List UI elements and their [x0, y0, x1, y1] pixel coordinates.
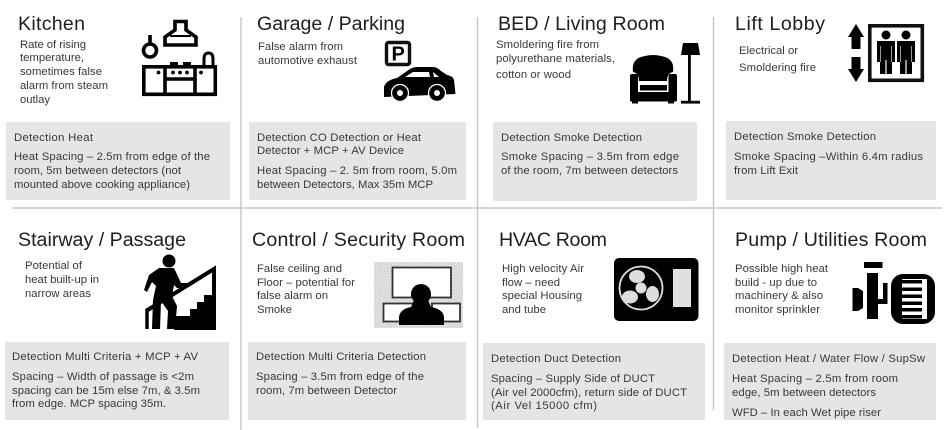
text: garage risk: automotive exhaust [258, 55, 358, 67]
text: lift detection: Detection Smoke Detection [734, 131, 876, 143]
heading: kitchen: Kitchen [18, 13, 85, 35]
text: kitchen risk: temperature, [20, 52, 84, 64]
text: garage risk [258, 41, 358, 67]
icon: parking car: P [392, 44, 405, 66]
text: control detection: room, 7m between Detector [256, 385, 397, 397]
box: garage detection [249, 122, 466, 200]
text: pump detection: edge, 5m between detectors [732, 387, 876, 399]
box: hvac detection [483, 343, 705, 420]
text: lift detection: Smoke Spacing –Within 6.4m radius [734, 151, 923, 163]
heading: pump room: Pump / Utilities Room [735, 229, 927, 251]
text: garage detection: Detector + MCP + AV Device [257, 145, 404, 157]
text: pump detection: Heat Spacing – 2.5m from room [732, 373, 898, 385]
text: bed detection: Smoke Spacing – 3.5m from edge [501, 151, 679, 163]
panel: pump room [724, 229, 936, 420]
text: garage risk: False alarm from [258, 41, 343, 53]
icon: air conditioning unit [614, 258, 698, 321]
text: bed detection: Detection Smoke Detection [501, 132, 642, 144]
text: control risk: Smoke [257, 304, 292, 316]
text: bed risk [496, 39, 615, 81]
text: kitchen detection: room, 5m between detectors (not [14, 165, 182, 177]
text: garage detection [257, 132, 457, 191]
text: control detection [256, 351, 426, 397]
text: kitchen risk [20, 39, 108, 106]
text: lift detection: from Lift Exit [734, 165, 799, 177]
text: control detection: Spacing – 3.5m from edge of the [256, 371, 424, 383]
text: garage detection: Detection CO Detection or Heat [257, 132, 422, 144]
text: stairway detection [12, 351, 200, 410]
text: kitchen detection [14, 132, 210, 191]
text: hvac detection: (Air vel 2000cfm), return side of DUCT [491, 387, 687, 399]
text: stairway detection: spacing can be 15m else 7m, & 3.5m [12, 385, 200, 397]
text: lift risk: Smoldering fire [739, 62, 816, 74]
text: bed risk: cotton or wood [496, 69, 571, 81]
panel: stairway [5, 229, 229, 420]
text: pump risk: machinery & also [735, 290, 823, 302]
text: pump risk: Possible high heat [735, 263, 829, 275]
text: hvac detection: Detection Duct Detection [491, 353, 621, 365]
icon: person climbing stairs [144, 254, 216, 330]
text: stairway risk [25, 260, 99, 300]
text: pump detection: WFD – In each Wet pipe riser [732, 407, 881, 419]
icon: lift [848, 24, 922, 82]
text: pump risk: monitor sprinkler [735, 304, 820, 316]
box: stairway detection [5, 342, 229, 420]
box: pump detection [724, 343, 936, 420]
text: hvac detection [491, 353, 687, 412]
text: kitchen detection: Detection Heat [14, 132, 94, 144]
text: kitchen risk: sometimes false [20, 66, 102, 78]
text: hvac detection: (Air Vel 15000 cfm) [491, 400, 597, 412]
icon: operator at monitors [374, 262, 463, 328]
text: pump risk: build - up due to [735, 277, 817, 289]
icon: pump [852, 262, 935, 324]
text: hvac detection: Spacing – Supply Side of DUCT [491, 373, 655, 385]
text: lift risk [739, 45, 816, 74]
text: hvac risk: special Housing [502, 290, 582, 302]
text: control risk [257, 263, 355, 316]
heading: bed / living room: BED / Living Room [498, 13, 665, 35]
heading: control room: Control / Security Room [252, 229, 465, 251]
box: lift detection [726, 121, 936, 200]
text: bed risk: polyurethane materials, [496, 53, 615, 65]
text: stairway risk: heat built-up in [25, 274, 99, 286]
text: kitchen detection: mounted above cooking appliance) [14, 179, 190, 191]
text: pump risk [735, 263, 829, 316]
heading: lift lobby: Lift Lobby [735, 13, 825, 35]
text: hvac risk: High velocity Air [502, 263, 584, 275]
text: control detection: Detection Multi Criteria Detection [256, 351, 426, 363]
icon: kitchen [144, 22, 215, 95]
text: garage detection: between Detectors, Max 35m MCP [257, 179, 433, 191]
text: lift detection [734, 131, 923, 177]
text: stairway risk: narrow areas [25, 288, 91, 300]
text: pump detection [732, 353, 926, 419]
text: kitchen risk: Rate of rising [20, 39, 86, 51]
box: bed detection [493, 122, 697, 201]
text: kitchen risk: outlay [20, 94, 50, 106]
text: bed detection [501, 132, 679, 177]
box: control detection [248, 342, 466, 420]
panel: hvac room [483, 229, 705, 420]
text: stairway detection: Spacing – Width of passage is <2m [12, 371, 194, 383]
text: stairway risk: Potential of [25, 260, 83, 272]
text: stairway detection: Detection Multi Criteria + MCP + AV [12, 351, 198, 363]
text: hvac risk: and tube [502, 304, 546, 316]
heading: garage: Garage / Parking [257, 13, 405, 35]
text: stairway detection: from edge. MCP spacing 35m. [12, 398, 166, 410]
box: kitchen detection [6, 122, 230, 200]
panel: bed / living room [493, 13, 700, 201]
text: control risk: Floor – potential for [257, 277, 355, 289]
text: lift risk: Electrical or [739, 45, 798, 57]
text: bed detection: of the room, 7m between detectors [501, 165, 678, 177]
panel: lift lobby [726, 13, 936, 200]
panel: kitchen [6, 13, 230, 200]
icon: armchair and lamp [630, 43, 700, 104]
text: pump detection: Detection Heat / Water Flow / SupSw [732, 353, 926, 365]
heading: hvac room: HVAC Room [499, 229, 607, 251]
text: control risk: False ceiling and [257, 263, 342, 275]
text: hvac risk [502, 263, 584, 316]
text: bed risk: Smoldering fire from [496, 39, 599, 51]
panel: control room [248, 229, 466, 420]
text: hvac risk: flow – need [502, 277, 560, 289]
text: kitchen detection: Heat Spacing – 2.5m from edge of the [14, 151, 210, 163]
text: control risk: false alarm on [257, 290, 328, 302]
panel: garage [249, 13, 466, 200]
heading: stairway: Stairway / Passage [18, 229, 186, 251]
icon: parking car [384, 42, 456, 102]
text: kitchen risk: alarm from steam [20, 80, 108, 92]
text: garage detection: Heat Spacing – 2. 5m from room, 5.0m [257, 165, 457, 177]
